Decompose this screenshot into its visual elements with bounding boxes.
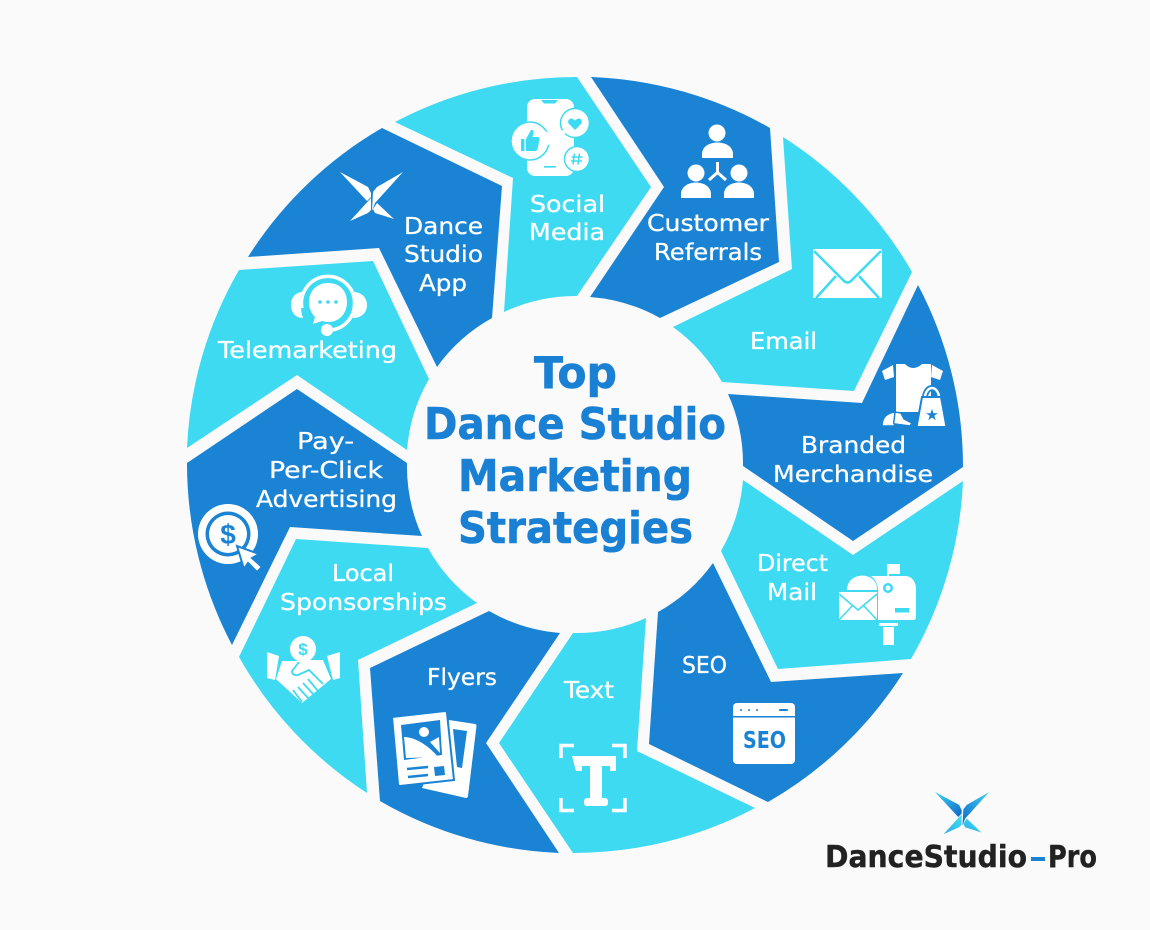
- icon: dollar target with cursor: [198, 504, 262, 572]
- label: [647, 211, 770, 266]
- label: Pay-: [297, 429, 354, 455]
- panel: Social Media: [395, 77, 651, 312]
- panel: Text: [499, 618, 755, 853]
- panel: Branded Merchandise: [728, 285, 963, 541]
- label: SEO: [682, 653, 727, 679]
- label: Sponsorships: [280, 590, 447, 616]
- icon: envelope: [813, 249, 882, 298]
- panel: Dance Studio App: [248, 128, 502, 367]
- wordmark suffix: Pro: [1048, 840, 1097, 875]
- icon: browser window with SEO: [733, 703, 795, 764]
- title: Top: [534, 348, 617, 399]
- icon: handshake with coin: [267, 636, 340, 703]
- label: [280, 561, 447, 616]
- label: App: [419, 271, 467, 297]
- label: [773, 433, 933, 488]
- label: Mail: [767, 580, 817, 606]
- label: [757, 551, 828, 606]
- icon: mailbox with envelope: [839, 564, 916, 645]
- label: Customer: [647, 211, 770, 237]
- title: [424, 348, 726, 554]
- icon: handshake with coin: $: [298, 640, 308, 659]
- icon: T in brackets: [561, 746, 625, 810]
- icon: browser window with SEO: SEO: [743, 728, 786, 754]
- label: Direct: [757, 551, 828, 577]
- wheel panel: marketing strategies: [187, 77, 963, 853]
- label: Studio: [404, 242, 483, 268]
- label: Referrals: [654, 240, 762, 266]
- label: [529, 192, 605, 246]
- label: Media: [529, 220, 605, 246]
- logo: DanceStudio-Pro: [825, 792, 1097, 875]
- logo mark: [935, 792, 989, 834]
- label: Merchandise: [773, 462, 933, 488]
- panel: Flyers: [370, 611, 560, 853]
- label: [404, 214, 483, 297]
- panel: Pay-Per-Click Advertising: [187, 389, 422, 645]
- title: Marketing: [458, 451, 692, 502]
- label: Local: [332, 561, 394, 587]
- panel: SEO: [649, 563, 903, 802]
- panel: Email: [673, 137, 912, 391]
- icon: phone with social bubbles: [511, 99, 590, 176]
- label: [256, 429, 397, 513]
- label: Branded: [801, 433, 906, 459]
- panel: Customer Referrals: [590, 77, 779, 318]
- panel: Direct Mail: [721, 480, 963, 669]
- icon: referral people: [681, 124, 754, 198]
- label: Advertising: [256, 487, 397, 513]
- label: Text: [563, 678, 614, 704]
- wordmark dash: [1031, 857, 1045, 861]
- label: Telemarketing: [217, 338, 397, 364]
- wordmark: DanceStudio: [825, 840, 1027, 875]
- title: Strategies: [458, 503, 693, 554]
- panel: Local Sponsorships: [239, 539, 477, 793]
- label: Email: [750, 329, 817, 355]
- label: Per-Click: [269, 458, 384, 484]
- title: Dance Studio: [424, 399, 726, 450]
- icon: dollar target with cursor: $: [220, 519, 236, 550]
- panel: Telemarketing: [187, 261, 429, 450]
- icon: shirt, bag and cap: [882, 364, 946, 427]
- label: Flyers: [427, 665, 497, 691]
- icon: headset with chat bubble: [291, 276, 367, 336]
- icon: butterfly logo: [340, 172, 403, 221]
- label: Social: [530, 192, 605, 218]
- label: Dance: [404, 214, 483, 240]
- icon: flyers sheets: [392, 711, 476, 798]
